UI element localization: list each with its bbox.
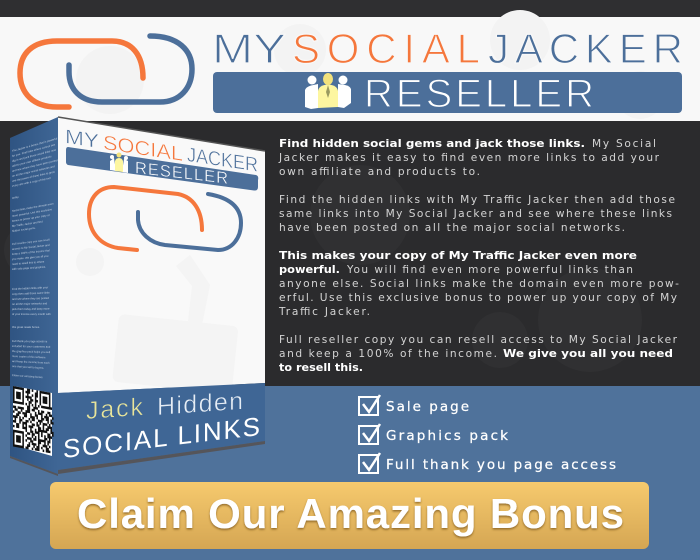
box side panel: add to your own affiliate products: [12, 154, 52, 168]
box logo title: JACKER: [187, 144, 258, 177]
title: MY: [212, 25, 286, 72]
paragraph 3: anyone else. Social links make the domain even more pow-: [279, 278, 679, 290]
call to action button: Claim Our Amazing Bonus: [77, 490, 624, 537]
title: [212, 25, 683, 72]
QR code: [13, 386, 54, 456]
icon: three business people: [305, 73, 351, 109]
top dark band: [0, 0, 700, 17]
box side panel: every site with a copy of this tool: [12, 176, 51, 188]
box side panel: Full thank you page access is: [12, 339, 48, 343]
box reseller banner: [66, 147, 258, 191]
item: Graphics pack: Graphics pack: [386, 428, 508, 444]
box side panel: bonus to power up your copy of: [12, 213, 50, 223]
title: JACKER: [488, 25, 683, 72]
slogan: Jack Hidden: Hidden: [157, 387, 243, 421]
box logo title: [65, 126, 258, 177]
box side panel: included for your customers and: [12, 344, 51, 349]
item: Sale page: Sale page: [386, 399, 469, 415]
paragraph 3: erful. Use this exclusive bonus to power up your copy of My: [279, 292, 677, 304]
dark description panel: [0, 121, 700, 386]
box side panel: the graphics pack helps you sell: [12, 349, 50, 354]
paragraph 3: This makes your copy of My Traffic Jacker even more: [279, 251, 637, 262]
box side panel: for you. Find links others cannot see: [12, 142, 56, 158]
box logo paperclip: [89, 187, 241, 250]
box side panel: Social links make the domain even: [12, 201, 54, 213]
box reseller banner: RESELLER: [135, 158, 228, 188]
box front panel: [58, 117, 265, 393]
box side panel: use the power of these links to grow: [12, 170, 55, 183]
paragraph 4: to resell this.: [279, 363, 363, 374]
box side panel: and see where they have been posted: [12, 158, 58, 173]
item: Full thank you page access: Full thank you page access: [386, 457, 616, 473]
paragraph 3: [278, 251, 679, 318]
checklist: [359, 395, 616, 473]
box logo title: SOCIAL: [103, 132, 183, 166]
box front blue band: [58, 383, 265, 474]
box side panel: Claim our amazing bonus.: [12, 373, 43, 379]
box side panel: Full reseller copy you can resell: [12, 237, 50, 246]
box side panel: you make. We give you all you: [12, 254, 49, 261]
paragraph 4: We give you all you need: [503, 349, 673, 360]
box side panel: one that you sell to buyers.: [12, 364, 44, 370]
box side panel: more powerful. Use this exclusive: [12, 207, 52, 218]
box side panel: on all the major social networks and: [12, 164, 55, 178]
paragraph 4: and keep a 100% of the income.: [279, 348, 497, 360]
icon: small people: [110, 152, 128, 173]
box side panel: dig in and jack those social links now: [12, 148, 56, 163]
blue lower panel: [0, 386, 700, 560]
box side panel: The Jacker is a bonus that is powerful: [12, 136, 58, 153]
box side panel: keep a 100% of the income that: [12, 248, 50, 256]
reseller banner: RESELLER: [364, 72, 594, 116]
box side panel: jack them today and keep more: [11, 307, 50, 311]
slogan: Jack Hidden: [86, 387, 243, 425]
paragraph 2: have been posted on all the major social networks.: [279, 222, 625, 234]
paragraph 1: [278, 138, 660, 178]
box side panel: today.: [12, 195, 19, 200]
box side panel: with sale page and graphics.: [12, 265, 46, 271]
paragraph 4: Full reseller copy you can resell access to My Social Jacker: [279, 334, 678, 346]
item: Sale page: [359, 395, 469, 415]
paragraph 1: Find hidden social gems and jack those links.: [279, 139, 585, 150]
paragraph 1: My Social: [592, 138, 656, 150]
box side panel: and keep the income from each: [12, 359, 50, 365]
box side panel: [10, 117, 58, 476]
box side panel: more copies of this software: [12, 354, 46, 359]
paragraph 2: Find the hidden links with My Traffic Jacker then add those: [279, 194, 675, 206]
header panel: [0, 10, 700, 121]
paragraph 2: same links into My Social Jacker and see where these links: [279, 208, 672, 220]
paragraph 3: powerful.: [279, 265, 340, 276]
box side panel: hidden social gems.: [12, 226, 36, 233]
paragraph 3: Traffic Jacker.: [278, 306, 370, 318]
box side panel: access to My Social Jacker and: [12, 243, 50, 251]
slogan: Social Links: SOCIAL LINKS: [63, 411, 260, 464]
box logo title: MY: [65, 126, 99, 153]
paragraph 4: [279, 334, 678, 374]
box side panel: My Traffic Jacker and find: [12, 219, 43, 228]
box side panel: need to resell this to others: [12, 259, 45, 266]
box side panel: Find the hidden links with your: [12, 285, 48, 291]
reseller banner: [213, 72, 682, 116]
logo: paperclip: [20, 36, 192, 107]
box side panel: this great resale bonus.: [12, 325, 40, 329]
product box: [10, 117, 265, 476]
slogan: Jack Hidden: Jack: [86, 393, 143, 425]
box side panel: of your income every month with: [12, 312, 51, 316]
title: SOCIAL: [292, 25, 480, 72]
paragraph 1: Jacker makes it easy to find even more links to add your: [278, 152, 660, 164]
paragraph 3: You will find even more powerful links than: [346, 264, 633, 276]
paragraph 1: own affiliate and products to.: [279, 166, 480, 178]
box side panel: copy then add those same links: [12, 290, 50, 296]
paragraph 2: [279, 194, 675, 234]
box side panel: on all the major networks and: [12, 301, 48, 306]
box side panel: and see where they are posted: [12, 296, 49, 301]
item: Graphics pack: [359, 424, 508, 444]
call to action button: [50, 482, 649, 549]
